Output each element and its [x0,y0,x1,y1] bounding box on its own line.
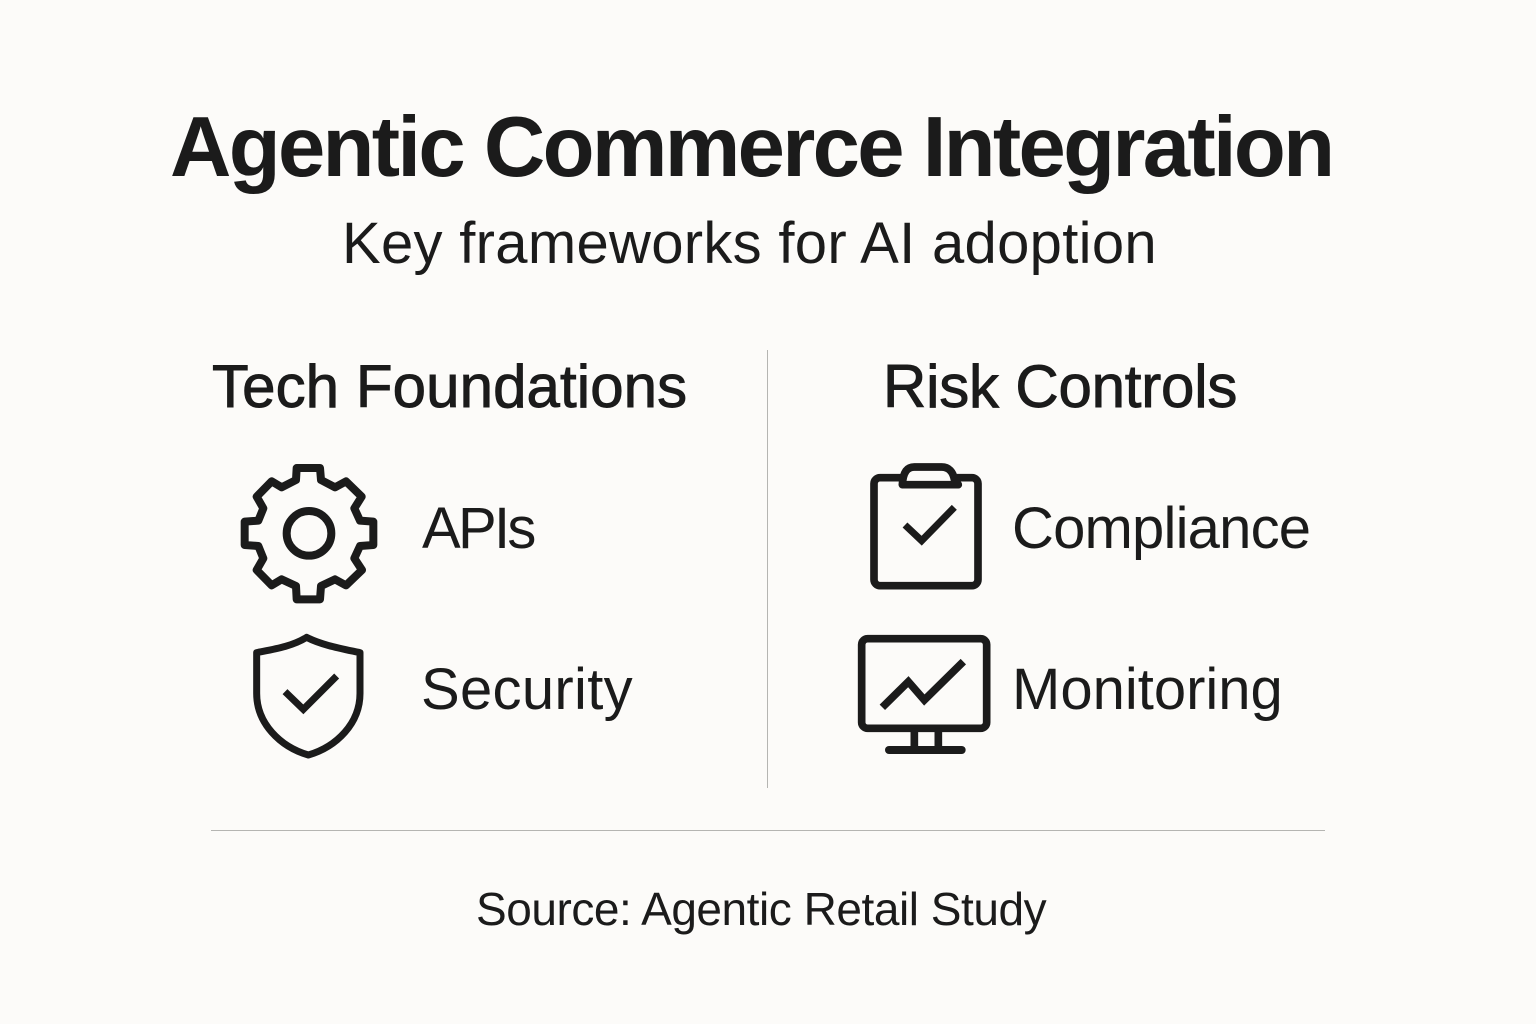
heading: Risk Controls: Risk Controls [883,353,1237,420]
label: Security: Security [421,657,633,722]
horizontal divider [211,830,1325,831]
icon: monitor [858,634,990,754]
label: Monitoring: Monitoring [1012,657,1283,722]
subtitle: Key frameworks for AI adoption [342,211,1157,276]
title: Agentic Commerce Integration [170,100,1332,195]
label: APIs: APIs [422,496,534,561]
vertical divider [767,350,768,788]
heading: Tech Foundations: Tech Foundations [212,353,687,420]
label: Compliance: Compliance [1012,496,1310,561]
source note: Source: Agentic Retail Study [476,883,1046,935]
icon: clipboard [870,463,982,590]
icon: shield [253,634,364,758]
icon: gear [240,464,378,604]
